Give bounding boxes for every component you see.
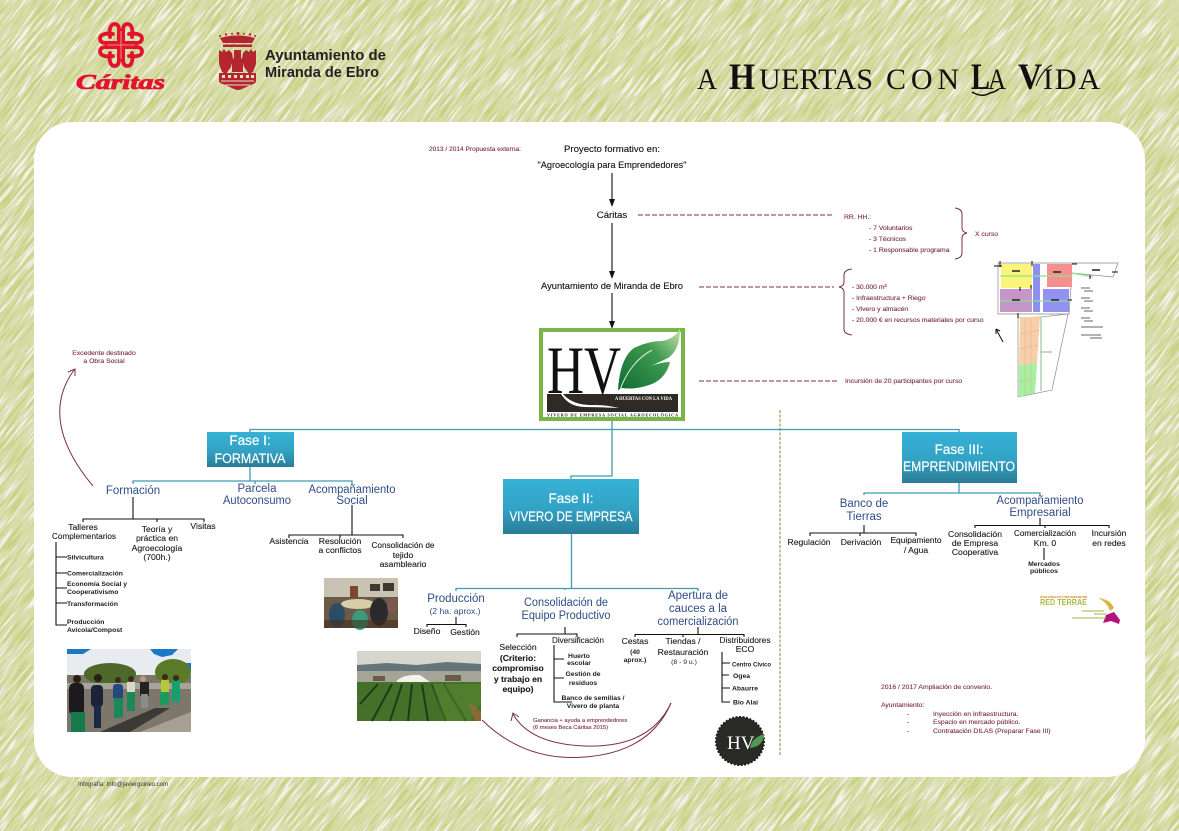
- text: 2016/2017 agreement: Espacio en mercado público.: [933, 719, 1020, 726]
- workshops list: Avícola/Compost: [67, 627, 123, 634]
- workshops list: Economía Social y: [67, 581, 127, 588]
- branch: Acompañamiento Social: Acompañamiento: [308, 484, 396, 496]
- photo: meeting: [324, 578, 398, 630]
- text: profit note: (6 meses Beca Cáritas 2015): [533, 725, 608, 731]
- branch: Formación: [52, 485, 216, 634]
- logo: Ayuntamiento de Miranda de Ebro: Miranda de Ebro: [265, 65, 379, 81]
- text: municipal resources: [852, 284, 984, 324]
- text: 2016/2017 agreement: -: [907, 719, 909, 726]
- text: municipal resources: - 30.000 m²: [852, 284, 887, 291]
- workshops list: Cooperativismo: [67, 589, 118, 596]
- text: municipal resources: - 20.000 € en recursos materiales por curso: [852, 317, 984, 324]
- photo: field: [357, 651, 481, 721]
- text: per course: X curso: [975, 231, 998, 238]
- dark band: [547, 394, 678, 412]
- diversification list: Vivero de planta: [567, 703, 619, 710]
- icon: heart cross: [100, 24, 142, 66]
- branch: Acompañamiento Empresarial: Consolidación: [948, 529, 1002, 539]
- branch: Consolidación de Equipo Productivo: (Criterio:: [500, 653, 536, 663]
- workshops list: Producción: [67, 619, 104, 626]
- connectors: Fase I: [133, 467, 352, 484]
- text: 2016/2017 agreement: -: [907, 711, 909, 718]
- text: profit note: Ganancia + ayuda a emprendedores: [533, 718, 627, 724]
- text: surplus note: Excedente destinado: [72, 350, 136, 357]
- branch: Apertura de cauces: Tiendas /: [665, 636, 701, 646]
- panel: Fase II: VIVERO DE EMPRESA: [510, 509, 632, 524]
- branch: Acompañamiento Social: asambleario: [380, 559, 427, 569]
- branch: Acompañamiento Empresarial: Empresarial: [1009, 507, 1071, 519]
- branch: Apertura de cauces: Restauración: [658, 647, 709, 657]
- diversification list: Huerto: [568, 653, 590, 660]
- branch: Acompañamiento Empresarial: en redes: [1092, 538, 1126, 548]
- branch: Banco de Tierras: Equipamiento: [890, 535, 942, 545]
- diversification list: Banco de semillas /: [561, 695, 625, 702]
- text: human resources: RR. HH.:: [844, 214, 871, 221]
- text: participants: Incursión de 20 participantes por curso: [845, 378, 962, 385]
- branch: Consolidación de Equipo Productivo: Diversificación: [552, 635, 604, 645]
- branch: Acompañamiento Empresarial: Comercialización: [1014, 528, 1076, 538]
- branch: Acompañamiento Empresarial: Acompañamiento: [996, 495, 1084, 507]
- branch: Producción: (2 ha. aprox.): [429, 606, 481, 616]
- text: 2016/2017 agreement: [881, 684, 1050, 735]
- text: infographic credit: Infografía: Info@javierguineo.com: [78, 782, 168, 788]
- logo: HV vivero: A HUERTAS CON LA VIDA: [615, 397, 672, 402]
- branch: Acompañamiento Empresarial: Km. 0: [1034, 538, 1056, 548]
- icon: HV round seal: HV: [727, 733, 755, 754]
- text: municipal resources: - Infraestructura + Riego: [852, 295, 926, 302]
- title: A: [988, 63, 1006, 96]
- diversification list: [554, 645, 625, 710]
- branch: Formación: Formación: [106, 485, 160, 497]
- branch: Acompañamiento Social: Resolución: [319, 536, 361, 546]
- diversification list: escolar: [567, 660, 591, 667]
- arrow: profit return curve: [511, 703, 671, 746]
- logo: Red Terrae: RED TERRAE: [1040, 598, 1088, 607]
- branch: Consolidación de Equipo Productivo: [492, 597, 625, 710]
- branch: Acompañamiento Empresarial: públicos: [1030, 568, 1058, 575]
- branch: Banco de Tierras: [788, 498, 942, 555]
- logo: Red Terrae: Asociación Internacional: [1040, 595, 1087, 599]
- branch: Formación: Talleres: [68, 522, 98, 532]
- text: training project: "Agroecología para Emprendedores": [538, 160, 686, 171]
- text: 2016/2017 agreement: Inyección en infraestructura.: [933, 711, 1018, 718]
- text: 2016/2017 agreement: Contratación DILAS (Preparar Fase III): [933, 728, 1050, 735]
- branch: Apertura de cauces: cauces a la: [669, 603, 728, 615]
- branch: Consolidación de Equipo Productivo: Equipo Productivo: [522, 610, 610, 622]
- arrow: Ayuntamiento to logo: [609, 293, 615, 329]
- distributors list: [722, 652, 771, 706]
- base with waves: [219, 73, 256, 90]
- branch: Parcela Autoconsumo: Autoconsumo: [223, 495, 291, 507]
- branch: Apertura de cauces: aprox.): [624, 657, 646, 664]
- icon: HV round seal: [716, 717, 764, 765]
- branch: Apertura de cauces: Cestas: [622, 636, 648, 646]
- branch: Formación: Agroecología: [132, 543, 183, 553]
- branch: Banco de Tierras: Tierras: [846, 511, 882, 523]
- text: human resources: - 1 Responsable programa: [869, 247, 950, 254]
- icon: coat of arms: [219, 32, 256, 90]
- panel: Fase I: FORMATIVA: [214, 451, 286, 466]
- text: training project: Proyecto formativo en:: [564, 144, 660, 155]
- branch: Consolidación de Equipo Productivo: Selección: [499, 642, 537, 652]
- brace: per course: [955, 208, 967, 259]
- arrow: project to Cáritas: [609, 173, 615, 207]
- logo: Ayuntamiento de Miranda de Ebro: [219, 32, 386, 90]
- panel: Fase III: EMPRENDIMIENTO: [903, 459, 1015, 474]
- text: 2016/2017 agreement: Ayuntamiento:: [881, 702, 924, 709]
- text: profit note: [533, 718, 627, 731]
- branch: Banco de Tierras: Derivación: [841, 537, 882, 547]
- workshops list: Comercialización: [67, 570, 123, 578]
- branch: Acompañamiento Empresarial: Mercados: [1028, 561, 1060, 568]
- branch: Acompañamiento Social: tejido: [393, 550, 413, 560]
- branch: Banco de Tierras: Banco de: [840, 498, 888, 510]
- branch: Parcela Autoconsumo: Parcela: [238, 483, 277, 495]
- text: training project: [538, 144, 686, 171]
- branch: Acompañamiento Empresarial: [948, 495, 1127, 575]
- branch: Acompañamiento Social: Social: [336, 495, 368, 507]
- distributors list: Bio Alai: [733, 700, 758, 706]
- panel: white content area: [34, 122, 1145, 777]
- branch: Formación: práctica en: [136, 533, 178, 543]
- panel: Fase I: [207, 432, 294, 467]
- text: surplus note: a Obra Social: [83, 358, 125, 365]
- vertical dashed divider: [779, 410, 781, 755]
- branch: Producción: Diseño: [414, 626, 441, 636]
- branch: Apertura de cauces: Apertura de: [668, 590, 728, 602]
- connectors: main teal tree: [250, 421, 959, 479]
- branch: Acompañamiento Social: Consolidación de: [372, 540, 435, 550]
- branch: Apertura de cauces: comercialización: [658, 616, 738, 628]
- people: [69, 674, 180, 732]
- logo: Red Terrae: [1040, 595, 1120, 624]
- eagles and tower: [219, 49, 233, 74]
- connectors: Fase II: [456, 534, 698, 591]
- text: human resources: - 7 Voluntarios: [869, 225, 913, 232]
- text: 2016/2017 agreement: -: [907, 728, 909, 735]
- branch: Acompañamiento Empresarial: Cooperativa: [952, 547, 998, 557]
- branch: Acompañamiento Social: [269, 484, 435, 569]
- branch: Formación: Teoría y: [142, 524, 173, 534]
- logo: HV vivero: [541, 329, 683, 419]
- distributors list: Centro Cívico: [732, 662, 771, 668]
- branch: Consolidación de Equipo Productivo: compromiso: [492, 663, 544, 673]
- title: A: [697, 63, 717, 96]
- title: CON: [886, 63, 959, 96]
- branch: Producción: Producción: [427, 593, 485, 605]
- branch: Apertura de cauces: Distribuidores: [720, 635, 770, 645]
- diversification list: residuos: [569, 680, 597, 687]
- branch: Formación: Visitas: [190, 521, 216, 531]
- branch: Acompañamiento Social: a conflictos: [318, 545, 362, 555]
- title: UERTAS: [759, 63, 873, 96]
- branch: Acompañamiento Empresarial: de Empresa: [952, 538, 998, 548]
- branch: Producción: [414, 593, 485, 637]
- title: [697, 57, 1100, 98]
- branch: Consolidación de Equipo Productivo: Consolidación de: [524, 597, 608, 609]
- branch: Formación: (700h.): [143, 552, 171, 562]
- text: Ayuntamiento: Ayuntamiento de Miranda de Ebro: [541, 281, 683, 292]
- text: municipal resources: - Vivero y almacén: [852, 306, 908, 313]
- photo: team on site: [67, 649, 191, 732]
- text: human resources: - 3 Técnicos: [869, 236, 906, 243]
- branch: Banco de Tierras: / Agua: [904, 545, 928, 555]
- title: H: [729, 57, 755, 98]
- logo: HV vivero: VIVERO DE EMPRESA SOCIAL AGROECOLÓGICA: [547, 412, 678, 418]
- panel: Fase II: [503, 479, 639, 534]
- branch: Apertura de cauces: ECO: [736, 644, 755, 654]
- title: IDA: [1043, 63, 1100, 96]
- text: human resources: [844, 214, 950, 254]
- arrow: field to commercialisation curve: [482, 703, 671, 758]
- title: V: [1018, 57, 1042, 98]
- crown: [220, 36, 255, 43]
- branch: Acompañamiento Empresarial: Incursión: [1092, 528, 1127, 538]
- dashed leader: Ayuntamiento: [699, 286, 834, 288]
- panel: Fase I: Fase I:: [229, 433, 271, 448]
- workshops list: [56, 542, 127, 634]
- branch: Acompañamiento Social: Asistencia: [269, 536, 309, 546]
- map legend: [1081, 288, 1103, 338]
- branch: Consolidación de Equipo Productivo: equipo): [502, 684, 534, 694]
- logo: Cáritas: [76, 24, 165, 94]
- branch: Parcela Autoconsumo: [223, 483, 291, 507]
- arrow: Cáritas to Ayuntamiento: [609, 223, 615, 279]
- distributors list: Ogea: [733, 673, 750, 680]
- icon: leaf: [618, 329, 680, 390]
- branch: Banco de Tierras: Regulación: [788, 537, 831, 547]
- panel: Fase II: Fase II:: [548, 491, 594, 506]
- branch: Producción: Gestión: [450, 627, 480, 637]
- text: 2016/2017 agreement: 2016 / 2017 Ampliación de convenio.: [881, 684, 992, 691]
- workshops list: Silvicultura: [67, 554, 104, 562]
- branch: Apertura de cauces: (40: [630, 649, 640, 656]
- branch: Apertura de cauces: (8 - 9 u.): [671, 659, 697, 666]
- branch: Consolidación de Equipo Productivo: y trabajo en: [494, 674, 542, 684]
- logo wordmark: Ayuntamiento de: [265, 48, 386, 64]
- panel: Fase III: Fase III:: [935, 442, 983, 457]
- text: external proposal date: 2013 / 2014 Propuesta externa:: [429, 146, 521, 153]
- title: L: [971, 57, 990, 98]
- text: surplus note: [72, 350, 136, 365]
- text: Cáritas: Cáritas: [597, 210, 627, 221]
- dashed leader: logo: [699, 380, 838, 382]
- distributors list: Abaurre: [732, 686, 758, 692]
- diversification list: Gestión de: [565, 671, 601, 678]
- panel: Fase III: [902, 432, 1017, 483]
- dashed leader: Cáritas: [638, 214, 833, 216]
- site plan map: [994, 261, 1118, 397]
- branch: Formación: Complementarios: [52, 531, 116, 541]
- arrow: surplus curve: [60, 369, 93, 486]
- icon: HV letters: HV: [547, 332, 621, 408]
- logo wordmark: Cáritas: [76, 70, 165, 94]
- workshops list: Transformación: [67, 601, 118, 608]
- north arrow: [996, 329, 1003, 342]
- connectors: Fase III: [864, 483, 1040, 495]
- branch: Apertura de cauces: [622, 590, 771, 706]
- brace: municipal resources: [839, 269, 852, 335]
